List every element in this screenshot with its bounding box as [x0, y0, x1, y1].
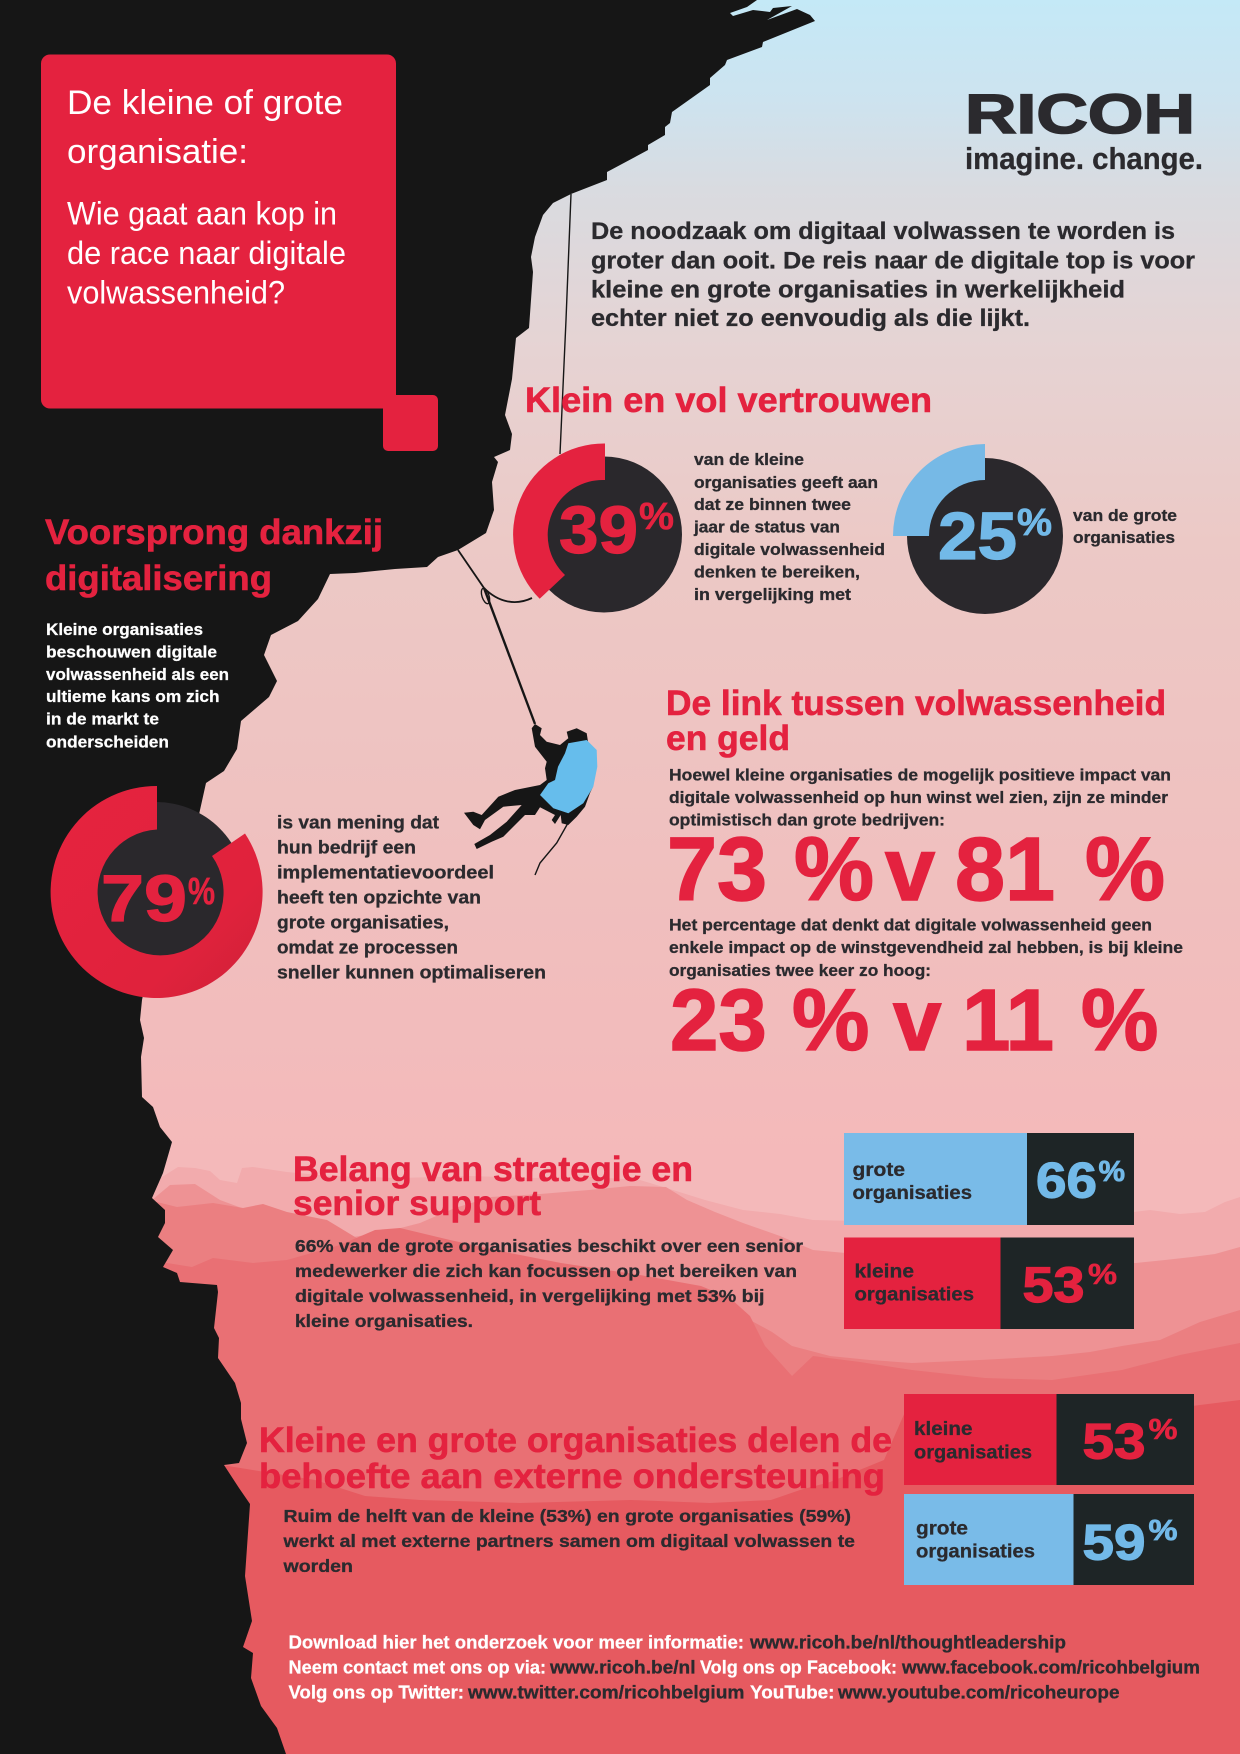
- heading: Voorsprong dankzij digitalisering: digitalisering: [45, 559, 272, 598]
- heading: Kleine en grote organisaties: behoefte aan externe ondersteuning: [259, 1457, 885, 1496]
- stat: 73 % v 81 %: %: [1085, 820, 1165, 920]
- bar: kleine organisaties 53%: 53: [1022, 1257, 1084, 1313]
- intro text: [591, 218, 1195, 332]
- mountain range background: [100, 1167, 1240, 1754]
- bar: kleine organisaties 53% external: 53: [1082, 1414, 1146, 1470]
- text: implementation advantage: omdat ze processen: [277, 938, 458, 958]
- intro text: echter niet zo eenvoudig als die lijkt.: [591, 305, 1030, 332]
- footer links: Volg ons op Facebook:: [700, 1658, 897, 1678]
- title speech box: [41, 54, 438, 451]
- text: external partners: worden: [282, 1556, 353, 1576]
- text: implementation advantage: implementatievoordeel: [277, 862, 494, 882]
- text: profit impact: Hoewel kleine organisaties de mogelijk positieve impact van: [669, 766, 1171, 784]
- text: senior support: 66% van de grote organisaties beschikt over een senior: [295, 1236, 803, 1256]
- heading: Belang van strategie: Belang van strategie en: [293, 1150, 693, 1189]
- stat: 25% donut: [893, 444, 1063, 614]
- stat: 23 % v 11 %: %: [792, 972, 869, 1069]
- bar: grote organisaties 59% external: %: [1148, 1515, 1178, 1547]
- bar: kleine organisaties 53% external: [904, 1394, 1194, 1485]
- text: implementation advantage: sneller kunnen optimaliseren: [277, 962, 546, 982]
- stat: 73 % v 81 %: v: [885, 820, 935, 920]
- title text: [67, 84, 346, 310]
- stat: 79% donut: [51, 786, 263, 998]
- title text: volwassenheid?: [67, 274, 285, 310]
- bar: grote organisaties 66%: [844, 1133, 1134, 1225]
- heading: De link tussen volwassenheid en geld: De link tussen volwassenheid: [666, 684, 1166, 723]
- lower rope and carabiner: [458, 550, 535, 724]
- heading: De link tussen volwassenheid en geld: en geld: [666, 719, 790, 758]
- title text: Wie gaat aan kop in: [67, 196, 337, 232]
- stat: 39% donut: 39: [559, 493, 638, 568]
- text: no impact: enkele impact op de winstgevendheid zal hebben, is bij kleine: [669, 938, 1183, 957]
- title text: organisatie:: [67, 133, 248, 171]
- stat: 23 % v 11 %: 11: [962, 972, 1054, 1069]
- bar: kleine organisaties 53% external: organisaties: [914, 1442, 1032, 1464]
- bar: kleine organisaties 53%: organisaties: [854, 1284, 974, 1306]
- text: small organisations: digitale volwassenheid: [694, 541, 885, 559]
- bar: grote organisaties 59% external: grote: [916, 1518, 968, 1540]
- text: small organisations: van de kleine: [694, 451, 804, 469]
- footer links: YouTube:: [750, 1682, 834, 1702]
- bar: grote organisaties 59% external: 59: [1082, 1514, 1146, 1570]
- bar: kleine organisaties 53%: kleine: [854, 1260, 914, 1282]
- text: external partners: werkt al met externe partners samen om digitaal volwassen te: [282, 1531, 855, 1551]
- text: small organisations: jaar de status van: [693, 518, 840, 536]
- text: large organisations: [1073, 507, 1177, 547]
- footer links: www.youtube.com/ricoheurope: [837, 1682, 1120, 1702]
- text: small organisations: dat ze binnen twee: [694, 496, 851, 514]
- text: large organisations: van de grote: [1073, 507, 1177, 525]
- stat: 39% donut: [513, 443, 682, 612]
- bar: grote organisaties 66%: %: [1098, 1156, 1125, 1188]
- text: small organisations: [693, 451, 885, 604]
- stat: 39% donut: %: [639, 496, 674, 538]
- footer links: Neem contact met ons op via:: [288, 1658, 546, 1678]
- footer links: www.ricoh.be/nl: [549, 1658, 696, 1678]
- stat: 73 % v 81 %: %: [794, 820, 874, 920]
- stat: 25% donut: 25: [938, 499, 1017, 574]
- climbing rope from overhang: [560, 194, 571, 454]
- text: external partners: [282, 1506, 855, 1576]
- bar: kleine organisaties 53% external: %: [1148, 1414, 1178, 1446]
- text: small organisations: organisaties geeft aan: [694, 474, 878, 492]
- text: small organisations: denken te bereiken,: [694, 564, 860, 582]
- text: small organisations see opportunity: onderscheiden: [46, 734, 169, 752]
- stat: 23 % v 11 %: %: [1081, 972, 1158, 1069]
- text: no impact: organisaties twee keer zo hoog:: [669, 961, 931, 980]
- footer links: [288, 1632, 1200, 1702]
- stat: 73 % v 81 %: 81: [955, 820, 1055, 920]
- intro text: groter dan ooit. De reis naar de digitale top is voor: [591, 248, 1195, 274]
- heading: Kleine en grote organisaties: [259, 1421, 892, 1496]
- text: implementation advantage: grote organisaties,: [277, 912, 449, 932]
- text: senior support: medewerker die zich kan focussen op het bereiken van: [295, 1261, 797, 1281]
- text: profit impact: optimistisch dan grote bedrijven:: [669, 810, 945, 830]
- bar: grote organisaties 66%: 66: [1036, 1152, 1097, 1208]
- climber silhouette: [464, 724, 597, 875]
- text: senior support: kleine organisaties.: [295, 1311, 473, 1331]
- text: implementation advantage: heeft ten opzichte van: [277, 888, 481, 908]
- heading: Belang van strategie: [293, 1150, 693, 1223]
- text: small organisations see opportunity: Kleine organisaties: [46, 621, 203, 639]
- text: implementation advantage: [277, 812, 546, 982]
- footer links: www.twitter.com/ricohbelgium: [467, 1682, 744, 1702]
- text: small organisations see opportunity: [46, 621, 229, 752]
- text: small organisations see opportunity: in de markt te: [46, 710, 159, 728]
- text: small organisations see opportunity: ultieme kans om zich: [46, 688, 220, 706]
- RICOH logo: imagine. change.: [965, 141, 1203, 176]
- bar: grote organisaties 59% external: [904, 1494, 1194, 1585]
- intro text: De noodzaak om digitaal volwassen te worden is: [591, 218, 1175, 245]
- RICOH logo: [965, 82, 1203, 176]
- bar: grote organisaties 66%: organisaties: [852, 1182, 972, 1204]
- text: small organisations: in vergelijking met: [694, 586, 852, 604]
- intro text: kleine en grote organisaties in werkelijkheid: [591, 276, 1125, 304]
- footer links: Download hier het onderzoek voor meer informatie:: [288, 1632, 744, 1652]
- text: small organisations see opportunity: volwassenheid als een: [46, 666, 229, 684]
- text: profit impact: [669, 766, 1171, 830]
- heading: Belang van strategie: senior support: [293, 1184, 541, 1223]
- stat: 23 % v 11 %: v: [893, 972, 941, 1069]
- heading: Kleine en grote organisaties: Kleine en grote organisaties delen de: [259, 1421, 892, 1460]
- footer links: Volg ons op Twitter:: [288, 1682, 464, 1702]
- text: implementation advantage: is van mening dat: [277, 812, 439, 832]
- footer links: www.facebook.com/ricohbelgium: [901, 1658, 1200, 1678]
- title text: De kleine of grote: [67, 84, 343, 122]
- text: external partners: Ruim de helft van de kleine (53%) en grote organisaties (59%): [284, 1506, 851, 1526]
- bar: kleine organisaties 53%: [844, 1238, 1134, 1329]
- stat: 73 % v 81 %: 73: [667, 820, 767, 920]
- text: small organisations see opportunity: beschouwen digitale: [46, 644, 217, 662]
- text: implementation advantage: hun bedrijf een: [277, 838, 416, 858]
- bar: kleine organisaties 53%: %: [1088, 1259, 1117, 1291]
- heading: Klein en vol vertrouwen: Klein en vol vertrouwen: [525, 381, 932, 420]
- bar: grote organisaties 66%: grote: [852, 1159, 905, 1181]
- text: senior support: digitale volwassenheid, in vergelijking met 53% bij: [295, 1286, 764, 1306]
- RICOH logo: RICOH: [965, 82, 1195, 145]
- title text: de race naar digitale: [67, 235, 346, 271]
- stat: 79% donut: 79: [101, 861, 187, 935]
- bar: kleine organisaties 53% external: kleine: [914, 1418, 973, 1440]
- footer links: www.ricoh.be/nl/thoughtleadership: [749, 1632, 1066, 1652]
- heading: Voorsprong dankzij digitalisering: Voorsprong dankzij: [45, 513, 383, 552]
- text: profit impact: digitale volwassenheid op hun winst wel zien, zijn ze minder: [669, 788, 1168, 807]
- text: no impact: [669, 916, 1183, 980]
- stat: 23 % v 11 %: 23: [670, 972, 767, 1069]
- heading: Voorsprong dankzij digitalisering: [45, 513, 383, 598]
- stat: 25% donut: %: [1017, 502, 1052, 544]
- text: senior support: [295, 1236, 803, 1331]
- bar: grote organisaties 59% external: organisaties: [916, 1540, 1035, 1562]
- heading: De link tussen volwassenheid en geld: [666, 684, 1166, 758]
- black cliff silhouette: [0, 0, 815, 1754]
- stat: 79% donut: %: [188, 871, 215, 913]
- text: large organisations: organisaties: [1073, 529, 1175, 547]
- text: no impact: Het percentage dat denkt dat digitale volwassenheid geen: [669, 916, 1152, 934]
